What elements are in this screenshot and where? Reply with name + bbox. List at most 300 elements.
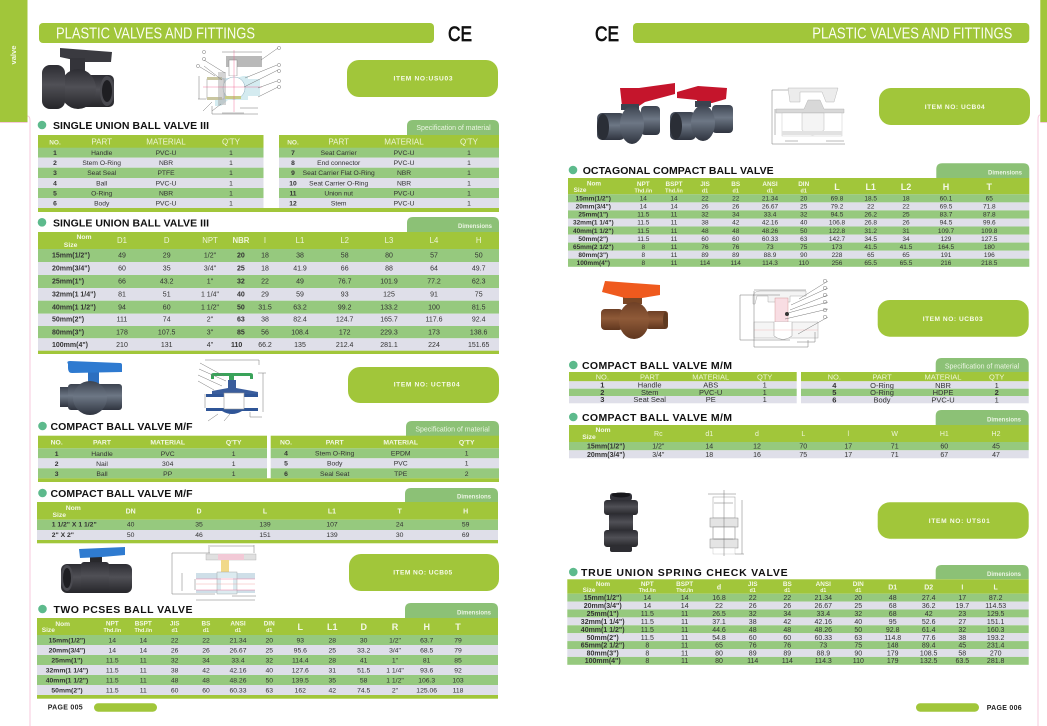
table: true union dimensions: 27: [958, 619, 966, 626]
table: two pcses dimensions: 32: [266, 657, 273, 664]
table: octagonal dimensions: 8: [641, 244, 645, 251]
table: two pcses dimensions: 14: [109, 637, 116, 644]
table: true union dimensions: 33.4: [816, 611, 830, 618]
table: single union material left: 1: [229, 170, 233, 177]
table: single union dimensions: 60: [118, 266, 126, 273]
table: octagonal dimensions: 48.26: [762, 228, 779, 235]
table: single union material left: Stem O-Ring: [82, 160, 121, 167]
table: single union dimensions: 88: [385, 266, 393, 273]
product photo: UTS01 valve: [604, 492, 638, 552]
table: single union dimensions: 133.2: [380, 304, 398, 311]
table: compact M/M dimensions: d: [755, 431, 759, 438]
table: true union dimensions: 8: [645, 650, 649, 658]
title bar: page 005: PLASTIC VALVES AND FITTINGS: [56, 26, 255, 42]
table: single union dimensions: L1: [296, 236, 304, 245]
table: true union dimensions: 160.3: [987, 627, 1005, 634]
table: compact M/F dimensions: 1 1/2" X 1 1/2": [52, 521, 97, 528]
table: two pcses dimensions: 1 1/2": [386, 677, 404, 684]
table: true union dimensions: 37.1: [712, 619, 726, 626]
table: octagonal dimensions: 100mm(4"): [577, 260, 610, 267]
table: two pcses dimensions: 20: [266, 637, 273, 644]
table: single union material right: Union nut: [324, 190, 353, 198]
table: compact M/F material left: MATERIAL: [150, 440, 185, 446]
CE mark: page 006: CE: [595, 22, 619, 46]
table: true union dimensions: 281.8: [987, 658, 1005, 665]
table: two pcses dimensions: 79: [454, 637, 462, 644]
table: two pcses dimensions: 31: [329, 667, 336, 674]
table: octagonal dimensions: 11.5: [637, 236, 650, 243]
table: two pcses dimensions: D: [360, 622, 367, 632]
table: compact M/F material left: 1: [232, 461, 236, 468]
table: octagonal dimensions: 76: [701, 244, 709, 251]
table: true union dimensions: 32: [749, 611, 757, 618]
table: compact M/M material left: 2: [600, 388, 604, 397]
table: single union material left: PTFE: [157, 170, 175, 177]
table: two pcses dimensions: 11.5: [106, 677, 119, 684]
table: single union material right: PVC-U: [394, 201, 415, 208]
table: compact M/F material left: [38, 436, 267, 478]
table: true union dimensions: 193.2: [987, 635, 1005, 642]
table: octagonal dimensions: 88.9: [764, 252, 777, 259]
table: octagonal dimensions: 60: [701, 236, 709, 243]
table: compact M/M material right: 6: [832, 395, 836, 404]
table: true union dimensions: 11.5: [641, 627, 654, 634]
table: two pcses dimensions: 14: [140, 637, 147, 644]
table: compact M/M dimensions: 16: [753, 452, 761, 459]
table: single union dimensions: 38: [296, 252, 304, 259]
table: two pcses dimensions: 40: [266, 667, 273, 674]
dimensions tab: Dimensions: [987, 572, 1022, 578]
table: compact M/M material left: PE: [706, 395, 716, 404]
table: single union dimensions: [38, 232, 499, 354]
table: true union dimensions: Thd./in: [639, 588, 656, 594]
table: single union dimensions: 99.2: [338, 304, 352, 311]
table: octagonal dimensions: 25mm(1"): [578, 212, 608, 219]
table: true union dimensions: 76: [783, 642, 791, 650]
table: two pcses dimensions: Size: [42, 627, 55, 634]
table: single union dimensions: 25: [237, 266, 245, 273]
heading: compact M/F dimensions: COMPACT BALL VALVE M/F: [50, 488, 193, 500]
table: true union dimensions: 50mm(2"): [587, 635, 619, 642]
spec tab: Specification of material: [416, 125, 491, 132]
table: single union dimensions: Size: [64, 242, 78, 249]
table: octagonal dimensions: ANSI: [762, 181, 778, 188]
table: octagonal dimensions: 80mm(3"): [578, 252, 608, 259]
table: true union dimensions: 34: [783, 611, 791, 618]
table: two pcses dimensions: 28: [329, 637, 336, 644]
table: two pcses dimensions: 33.4: [231, 657, 245, 664]
table: true union dimensions: 92.8: [886, 627, 900, 634]
table: compact M/F material left: Ball: [96, 471, 108, 478]
table: true union dimensions: 11: [681, 635, 688, 642]
table: true union dimensions: 25mm(1"): [587, 611, 619, 618]
table: octagonal dimensions: 18: [902, 196, 910, 203]
technical drawing: UCB05: [172, 545, 256, 600]
table: octagonal dimensions: 180: [984, 244, 995, 251]
table: true union dimensions: 40: [854, 619, 862, 626]
table: octagonal dimensions: 69.8: [831, 196, 844, 203]
table: true union dimensions: 22: [783, 595, 791, 602]
table: single union dimensions: 82.4: [293, 317, 307, 324]
table: single union dimensions: 32: [237, 278, 245, 285]
table: true union dimensions: Size: [583, 587, 596, 594]
table: compact M/F material right: EPDM: [391, 451, 411, 458]
table: compact M/F material left: Q'TY: [226, 440, 242, 446]
table: true union dimensions: 21.34: [815, 595, 832, 602]
item badge: UCB05: ITEM NO: UCB05: [393, 569, 453, 576]
table: octagonal dimensions: 106.8: [829, 220, 846, 227]
table: octagonal dimensions: L1: [865, 182, 876, 192]
table: true union dimensions: Nom: [596, 581, 610, 588]
table: octagonal dimensions: 14: [670, 196, 678, 203]
dimensions tab: Dimensions: [988, 170, 1023, 176]
table: compact M/M dimensions: 47: [992, 452, 1000, 459]
table: octagonal dimensions: 65mm(2 1/2"): [573, 244, 614, 251]
table: single union material left: 1: [229, 201, 233, 208]
table: single union material right: NBR: [397, 170, 411, 177]
table: octagonal dimensions: 256: [832, 260, 843, 267]
table: octagonal dimensions: 8: [641, 260, 645, 267]
table: single union material left: PVC-U: [156, 150, 177, 157]
table: compact M/F material left: NO.: [51, 440, 63, 446]
table: true union dimensions: 42.16: [815, 619, 832, 626]
table: two pcses dimensions: 48: [202, 677, 210, 684]
table: compact M/M material left: MATERIAL: [692, 373, 729, 382]
table: single union dimensions: 40: [237, 291, 245, 298]
table: single union dimensions: 212.4: [336, 342, 354, 349]
table: two pcses dimensions: 95.6: [294, 647, 307, 654]
table: octagonal dimensions: 65: [902, 252, 910, 259]
table: true union dimensions: 25: [854, 603, 862, 610]
table: single union material right: NO.: [287, 140, 299, 146]
table: true union dimensions: 76: [749, 642, 757, 650]
table: two pcses dimensions: 25: [266, 647, 273, 654]
table: two pcses dimensions: 41: [360, 657, 368, 664]
table: octagonal dimensions: 60: [732, 236, 740, 243]
table: compact M/F dimensions: D: [196, 509, 202, 516]
table: single union dimensions: 1 1/2": [201, 304, 220, 311]
table: compact M/M dimensions: 67: [940, 452, 948, 459]
table: true union dimensions: 114.53: [985, 603, 1006, 610]
table: true union dimensions: 32: [958, 627, 966, 634]
table: compact M/M dimensions: Size: [582, 434, 596, 441]
table: true union dimensions: 114.3: [815, 658, 832, 665]
table: single union dimensions: L3: [385, 236, 393, 245]
table: true union dimensions: 32: [854, 611, 862, 618]
table: single union dimensions: 49.7: [472, 266, 486, 273]
table: octagonal dimensions: 42.16: [762, 220, 779, 227]
table: true union dimensions: 110: [853, 658, 864, 665]
table: true union dimensions: 63: [854, 635, 862, 642]
table: two pcses dimensions: 42.16: [229, 667, 247, 674]
table: two pcses dimensions: 38: [171, 667, 179, 674]
table: true union dimensions: 108.5: [920, 650, 938, 658]
table: octagonal dimensions: 34: [732, 212, 740, 219]
table: single union dimensions: 1/2": [204, 252, 217, 259]
table: single union material right: 1: [467, 190, 471, 198]
heading: compact M/M dimensions: COMPACT BALL VALVE M/M: [582, 412, 732, 424]
table: octagonal dimensions: 110: [799, 260, 809, 267]
table: octagonal dimensions: BSPT: [665, 181, 683, 188]
table: octagonal dimensions: JIS: [700, 181, 711, 188]
table: two pcses dimensions: 35: [329, 677, 336, 684]
table: octagonal dimensions: 71.8: [983, 204, 996, 211]
dimensions tab: [936, 410, 1029, 425]
table: single union material right: Q'TY: [460, 138, 479, 146]
table: true union dimensions: 14: [681, 595, 689, 602]
table: two pcses dimensions: 15mm(1/2"): [49, 637, 85, 644]
table: true union dimensions: 11: [681, 627, 688, 634]
technical drawing: UTS01: [708, 490, 744, 556]
table: single union dimensions: 56: [261, 330, 269, 337]
table: true union dimensions: 68: [889, 603, 897, 610]
item badge: UCB03: [878, 300, 1029, 337]
table: compact M/F dimensions: 24: [396, 521, 404, 528]
table: single union material left: 1: [53, 150, 57, 157]
table: true union dimensions: d: [717, 584, 721, 591]
table: octagonal dimensions: Size: [574, 187, 587, 194]
table: octagonal dimensions: 20: [800, 196, 808, 203]
table: two pcses dimensions: 125.06: [416, 687, 437, 694]
table: single union dimensions: 165.7: [380, 317, 398, 324]
table: compact M/M material left: PART: [640, 373, 660, 382]
table: true union dimensions: 80mm(3"): [587, 650, 619, 658]
table: two pcses dimensions: JIS: [170, 621, 180, 628]
table: true union dimensions: 89.4: [922, 642, 936, 650]
table: octagonal dimensions: 22: [701, 196, 709, 203]
table: octagonal dimensions: 114: [700, 260, 711, 267]
table: compact M/M material left: QTY: [757, 373, 772, 382]
table: single union dimensions: 80: [385, 252, 393, 259]
table: single union material right: MATERIAL: [384, 138, 424, 146]
table: single union dimensions: 18: [261, 252, 269, 259]
table: single union dimensions: 151.65: [468, 342, 490, 349]
table: compact M/M material left: [569, 372, 797, 404]
table: two pcses dimensions: 11.5: [106, 657, 119, 664]
table: true union dimensions: 40mm(1 1/2"): [581, 627, 625, 634]
table: octagonal dimensions: 40mm(1 1/2"): [573, 228, 614, 235]
table: single union dimensions: 281.1: [380, 342, 398, 349]
table: true union dimensions: 80: [715, 650, 723, 658]
table: single union dimensions: 40mm(1 1/2"): [52, 304, 96, 311]
table: true union dimensions: 65: [715, 642, 723, 650]
table: compact M/F material right: 2: [465, 471, 469, 478]
table: single union material left: 3: [53, 170, 57, 177]
table: octagonal dimensions: 114: [731, 260, 741, 267]
table: true union dimensions: BSPT: [676, 581, 693, 588]
table: two pcses dimensions: 48: [171, 677, 179, 684]
table: two pcses dimensions: 139.5: [292, 677, 309, 684]
table: single union dimensions: 64: [430, 266, 438, 273]
table: two pcses dimensions: [37, 618, 498, 699]
table: true union dimensions: 58: [958, 650, 966, 658]
table: two pcses dimensions: 11: [140, 677, 147, 684]
table: single union material left: 5: [53, 190, 57, 198]
table: single union dimensions: 229.3: [380, 330, 398, 337]
table: single union dimensions: 4": [207, 342, 214, 349]
table: single union dimensions: 124.7: [336, 317, 354, 324]
table: compact M/F material right: 4: [284, 451, 288, 458]
table: true union dimensions: 77.6: [922, 635, 936, 642]
table: two pcses dimensions: L1: [327, 622, 338, 632]
product photo: UCB05 valve: [61, 547, 132, 593]
table: true union dimensions: 48: [889, 595, 897, 602]
table: compact M/F material left: 3: [55, 471, 59, 478]
table: single union dimensions: I: [264, 236, 266, 245]
table: single union dimensions: 100mm(4"): [52, 342, 88, 349]
table: compact M/M material right: 5: [832, 388, 836, 397]
table: compact M/M material right: 1: [995, 381, 999, 390]
table: octagonal dimensions: [568, 178, 1029, 267]
table: compact M/F material left: 2: [55, 461, 59, 468]
table: compact M/M material right: [801, 372, 1029, 404]
table: compact M/F dimensions: 139: [326, 532, 338, 539]
table: two pcses dimensions: BS: [202, 621, 211, 628]
table: octagonal dimensions: 34.5: [864, 236, 877, 243]
table: single union dimensions: 138.6: [470, 330, 488, 337]
table: single union dimensions: 63: [237, 317, 245, 324]
table: two pcses dimensions: 85: [454, 657, 462, 664]
table: octagonal dimensions: 8: [641, 252, 645, 259]
table: compact M/M dimensions: [569, 425, 1029, 459]
table: single union dimensions: 224: [428, 342, 440, 349]
table: compact M/M material left: 3: [600, 395, 604, 404]
heading: compact M/M spec: COMPACT BALL VALVE M/M: [582, 360, 732, 372]
table: single union material left: Ball: [96, 180, 108, 187]
dimensions tab: [405, 603, 498, 618]
table: single union material left: MATERIAL: [146, 138, 186, 146]
table: two pcses dimensions: 58: [360, 677, 368, 684]
table: true union dimensions: 14: [681, 603, 689, 610]
table: compact M/M dimensions: H2: [992, 431, 1001, 438]
table: single union dimensions: 74: [163, 317, 171, 324]
table: octagonal dimensions: 50mm(2"): [578, 236, 608, 243]
table: single union dimensions: 22: [261, 278, 269, 285]
table: two pcses dimensions: 42: [329, 687, 336, 694]
table: true union dimensions: 100mm(4"): [585, 658, 621, 665]
table: true union dimensions: 11: [681, 611, 688, 618]
table: single union material left: Q'TY: [222, 138, 241, 146]
table: two pcses dimensions: d1: [266, 628, 272, 634]
table: single union material left: 1: [229, 190, 233, 198]
table: single union dimensions: 178: [116, 330, 128, 337]
item badge: UCTB04: [348, 367, 499, 403]
table: two pcses dimensions: 11.5: [106, 667, 119, 674]
table: octagonal dimensions: 142.7: [829, 236, 846, 243]
table: single union dimensions: 81: [118, 291, 126, 298]
table: two pcses dimensions: 1": [392, 657, 399, 664]
table: compact M/M dimensions: l: [848, 431, 850, 438]
table: true union dimensions: 61.4: [922, 627, 936, 634]
table: compact M/M material right: 1: [995, 395, 999, 404]
table: compact M/F dimensions: T: [398, 509, 403, 516]
table: true union dimensions: 19.7: [955, 603, 969, 610]
table: octagonal dimensions: 26: [701, 204, 709, 211]
table: single union dimensions: 50mm(2"): [52, 317, 84, 324]
table: compact M/F dimensions: 151: [259, 532, 271, 539]
table: true union dimensions: 11: [681, 619, 688, 626]
table: single union dimensions: 117.6: [426, 317, 443, 324]
table: single union dimensions: NBR: [233, 236, 250, 245]
table: single union dimensions: 60: [163, 304, 171, 311]
table: two pcses dimensions: 28: [329, 657, 336, 664]
table: octagonal dimensions: 11: [671, 228, 678, 235]
table: true union dimensions: 54.8: [712, 635, 726, 642]
spec tab: Specification of material: [415, 426, 490, 433]
table: single union dimensions: NPT: [202, 236, 218, 245]
table: compact M/M material right: Body: [873, 395, 891, 404]
table: single union material right: 1: [467, 150, 471, 157]
item badge: UCB04: ITEM NO: UCB04: [925, 104, 985, 111]
table: compact M/F dimensions: DN: [126, 509, 136, 516]
table: two pcses dimensions: 11: [140, 657, 147, 664]
table: true union dimensions: 48.26: [815, 627, 832, 634]
table: octagonal dimensions: L: [834, 182, 840, 192]
table: single union dimensions: D: [164, 236, 170, 245]
table: compact M/F dimensions: L: [263, 509, 268, 516]
table: octagonal dimensions: 14: [640, 196, 647, 203]
table: true union dimensions: 87.2: [989, 595, 1003, 602]
table: true union dimensions: d1: [855, 588, 861, 594]
table: single union material right: Seat Carrier Flat O-Ring: [303, 170, 375, 177]
table: compact M/M material left: 1: [600, 381, 604, 390]
table: octagonal dimensions: d1: [702, 188, 708, 194]
table: two pcses dimensions: 11.5: [106, 687, 119, 694]
table: single union dimensions: 66: [341, 266, 349, 273]
table: compact M/M material right: NO.: [828, 373, 841, 382]
table: compact M/M dimensions: 20mm(3/4"): [587, 452, 625, 459]
table: compact M/F dimensions: Nom: [66, 505, 81, 512]
table: two pcses dimensions: 50mm(2"): [51, 687, 83, 694]
table: true union dimensions: 15mm(1/2"): [584, 595, 622, 602]
table: single union material left: 4: [53, 180, 57, 187]
table: true union dimensions: 129.5: [987, 611, 1005, 618]
table: compact M/F dimensions: H: [463, 509, 468, 516]
table: compact M/M material right: QTY: [989, 373, 1004, 382]
table: octagonal dimensions: 90: [800, 252, 808, 259]
table: two pcses dimensions: 68.5: [420, 647, 434, 654]
table: octagonal dimensions: 26: [902, 220, 910, 227]
table: octagonal dimensions: 75: [800, 244, 808, 251]
table: true union dimensions: 26.67: [815, 603, 832, 610]
table: compact M/F material right: 1: [465, 451, 469, 458]
table: single union material right: PVC-U: [394, 160, 415, 167]
table: true union dimensions: ANSI: [816, 581, 831, 588]
table: compact M/M material left: PVC-U: [699, 388, 722, 397]
heading: octagonal: OCTAGONAL COMPACT BALL VALVE: [583, 165, 774, 177]
table: octagonal dimensions: 89: [701, 252, 709, 259]
table: single union dimensions: 94: [118, 304, 126, 311]
table: octagonal dimensions: 129: [941, 236, 952, 243]
table: compact M/F material right: [271, 436, 499, 478]
table: two pcses dimensions: Thd./in: [134, 628, 152, 634]
table: compact M/F material left: 304: [162, 461, 174, 468]
table: single union dimensions: 49: [296, 278, 304, 285]
table: true union dimensions: 16.8: [712, 595, 726, 602]
table: octagonal dimensions: 11: [671, 244, 678, 251]
table: true union dimensions: JIS: [748, 581, 758, 588]
table: two pcses dimensions: DIN: [264, 621, 275, 628]
table: compact M/M material left: ABS: [703, 381, 718, 390]
table: octagonal dimensions: 48: [701, 228, 709, 235]
table: true union dimensions: 90: [854, 650, 862, 658]
table: two pcses dimensions: 106.3: [418, 677, 435, 684]
table: true union dimensions: 8: [645, 658, 649, 665]
table: octagonal dimensions: 127.5: [981, 236, 998, 243]
table: true union dimensions: 17: [958, 595, 966, 602]
table: octagonal dimensions: 11: [671, 236, 678, 243]
table: true union dimensions: 60: [783, 635, 791, 642]
